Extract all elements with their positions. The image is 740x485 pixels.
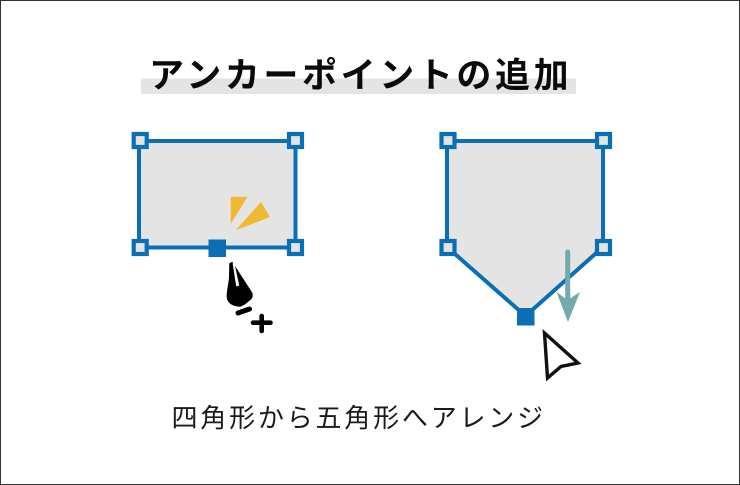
- caption: 四角形から五角形へアレンジ: [172, 403, 546, 433]
- title: アンカーポイントの追加: [149, 56, 572, 96]
- icon: yellow sparkle: [231, 197, 270, 230]
- icon: pen tool with plus: [227, 262, 270, 331]
- added anchor point: [208, 240, 226, 257]
- corner handle: lower left: [442, 241, 454, 254]
- diagram: rectangle with added anchor point: [134, 134, 302, 331]
- corner handle: bottom right: [289, 241, 302, 254]
- corner handle: top left: [442, 134, 454, 147]
- corner handle: top right: [289, 134, 302, 147]
- corner handle: top right: [597, 134, 610, 147]
- corner handle: lower right: [597, 241, 610, 254]
- diagram: pentagon after moving anchor point: [442, 134, 610, 378]
- title highlight bar: [141, 78, 576, 94]
- pentagon shape: [447, 141, 603, 316]
- moved anchor point: [517, 308, 534, 326]
- corner handle: top left: [134, 134, 147, 147]
- arrow: downward movement: [556, 252, 580, 322]
- rectangle shape: [139, 141, 296, 248]
- icon: selection cursor: [544, 333, 578, 378]
- corner handle: bottom left: [134, 241, 147, 254]
